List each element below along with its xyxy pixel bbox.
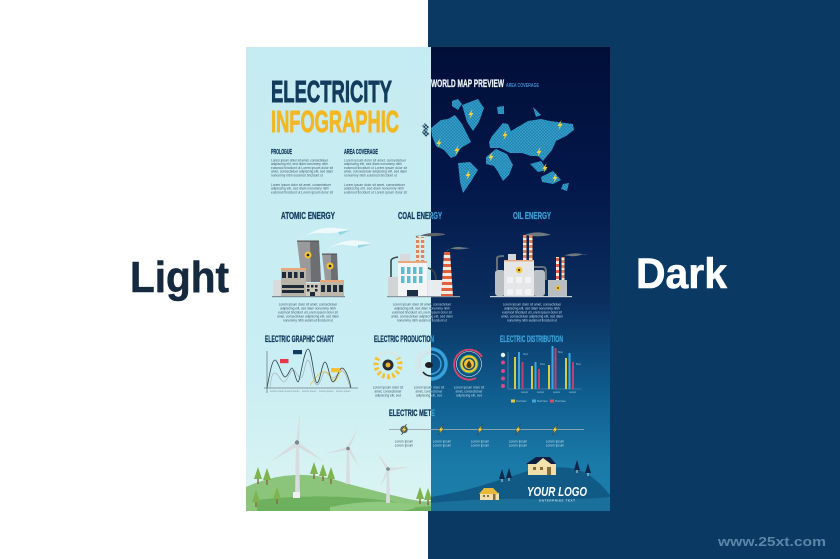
bar chart: electric distribution: Text bbox=[523, 353, 528, 356]
heading: electric graphic chart: ELECTRIC GRAPHIC CHART bbox=[265, 334, 334, 344]
logo bbox=[527, 484, 587, 502]
icon: wind turbine small bbox=[376, 452, 410, 503]
text block: prologue: Lorem ipsum dolor sit amet, consectetuer bbox=[271, 183, 332, 187]
text block: production three bbox=[454, 386, 484, 398]
text block: production three: amet, consectetuer bbox=[455, 390, 483, 394]
text block: coal description: euismod tincidunt ut Lorem ipsum dolor sit bbox=[392, 310, 452, 314]
text block: atomic description: nonummy nibh euismod tincidunt ut bbox=[283, 318, 333, 322]
text block: area coverage: Lorem ipsum dolor sit amet, consectetuer bbox=[344, 158, 407, 162]
text block: area coverage bbox=[344, 149, 407, 194]
line chart bbox=[264, 349, 358, 393]
bar chart: electric distribution: Lorem bbox=[537, 391, 544, 394]
text block: atomic description: Lorem ipsum dolor sit amet, consectetuer bbox=[279, 302, 338, 306]
text block: area coverage: amet, consectetuer adipiscing elit, sed diam bbox=[344, 170, 407, 174]
icons: dark trees bbox=[499, 460, 591, 482]
legend: Text here bbox=[555, 399, 566, 403]
panel: light half of poster bbox=[246, 47, 431, 511]
meter labels: Lorem ipsum bbox=[433, 440, 452, 444]
line chart: Lorem ipsum bbox=[302, 390, 316, 393]
meter labels bbox=[395, 440, 565, 448]
text block: atomic description: amet, consectetuer adipiscing elit, sed diam bbox=[277, 314, 339, 318]
heading: world map preview: AREA COVERAGE bbox=[506, 83, 539, 89]
text block: oil description: euismod tincidunt ut Lorem ipsum dolor sit bbox=[502, 310, 562, 314]
meter labels: Lorem ipsum bbox=[546, 444, 565, 448]
meter labels: Lorem ipsum bbox=[509, 444, 528, 448]
bar chart: electric distribution: Text bbox=[558, 351, 563, 354]
logo: ENTERPRISE TEXT bbox=[539, 498, 575, 502]
title: INFOGRAPHIC bbox=[271, 104, 399, 139]
text block: production two: amet, consectetuer bbox=[415, 390, 443, 394]
panel: dark half of poster bbox=[428, 47, 610, 511]
icon: wind turbine large bbox=[270, 412, 325, 498]
icons: meter markers bbox=[400, 424, 558, 435]
icon: oil power plant bbox=[490, 232, 588, 297]
landscape: light side bbox=[246, 412, 432, 511]
text block: prologue: euismod tincidunt ut Lorem ipsum dolor sit bbox=[271, 166, 333, 170]
heading: oil energy: OIL ENERGY bbox=[513, 211, 551, 222]
text block: coal description: nonummy nibh euismod tincidunt ut bbox=[397, 318, 447, 322]
meter line bbox=[389, 428, 584, 431]
bar chart: electric distribution: Text bbox=[576, 363, 581, 366]
legend: Text here bbox=[516, 399, 527, 403]
meter labels: Lorem ipsum bbox=[509, 440, 528, 444]
bar chart: electric distribution: Lorem bbox=[569, 391, 576, 394]
line chart: Lorem ipsum bbox=[319, 390, 333, 393]
icons: light trees bbox=[252, 462, 432, 507]
text block: atomic description: adipiscing elit, sed diam nonummy nibh bbox=[280, 306, 336, 310]
label: Dark: Dark bbox=[636, 250, 727, 298]
watermark: www.25xt.com bbox=[717, 535, 826, 549]
icons: bulbs bbox=[501, 353, 505, 388]
icon: atomic power plant bbox=[272, 228, 372, 297]
text block: oil description: nonummy nibh euismod tincidunt ut bbox=[507, 318, 557, 322]
text block: coal description: Lorem ipsum dolor sit amet, consectetuer bbox=[393, 302, 452, 306]
text block: area coverage: Lorem ipsum dolor sit amet, consectetuer bbox=[344, 183, 406, 187]
text block: area coverage: euismod tincidunt ut Lorem ipsum dolor sit bbox=[344, 166, 407, 170]
icon: oil production ring bbox=[454, 350, 482, 380]
line chart: Lorem ipsum bbox=[270, 390, 284, 393]
heading: coal energy: COAL ENERGY bbox=[398, 211, 442, 222]
text block: production three: Lorem ipsum dolor sit bbox=[454, 386, 484, 390]
icons: lightning markers on map bbox=[436, 109, 562, 183]
line chart: Lorem ipsum bbox=[285, 390, 299, 393]
bar chart: electric distribution: Lorem bbox=[521, 391, 528, 394]
text block: production one: Lorem ipsum dolor sit bbox=[373, 386, 403, 390]
text block: atomic description: euismod tincidunt ut Lorem ipsum dolor sit bbox=[278, 310, 338, 314]
text block: prologue: adipiscing elit, sed diam nonummy nibh bbox=[271, 187, 329, 191]
text block: area coverage: nonummy nibh euismod tincidunt ut bbox=[344, 173, 397, 177]
text block: production two: Lorem ipsum dolor sit bbox=[414, 386, 444, 390]
text block: prologue: Lorem ipsum dolor sit amet, consectetuer bbox=[271, 158, 329, 162]
icon: large house bbox=[526, 457, 556, 475]
text block: area coverage: adipiscing elit, sed diam nonummy nibh bbox=[344, 162, 402, 166]
meter labels: Lorem ipsum bbox=[471, 444, 490, 448]
icon: map fragment on light side bbox=[422, 123, 430, 137]
text block: production one: adipiscing elit, sed bbox=[375, 394, 401, 398]
bar chart: electric distribution bbox=[501, 346, 581, 403]
text block: production one: amet, consectetuer bbox=[374, 390, 402, 394]
line chart: Lorem ipsum bbox=[336, 390, 350, 393]
text block: prologue: adipiscing elit, sed diam nonummy nibh bbox=[271, 162, 328, 166]
meter labels: Lorem ipsum bbox=[395, 440, 414, 444]
text block: prologue: amet, consectetuer adipiscing elit, sed diam bbox=[271, 170, 333, 174]
text block: prologue: PROLOGUE bbox=[271, 149, 292, 156]
meter labels: Lorem ipsum bbox=[471, 440, 490, 444]
landscape: dark side bbox=[431, 457, 610, 511]
logo: YOUR LOGO bbox=[527, 484, 587, 499]
text block: coal description: adipiscing elit, sed diam nonummy nibh bbox=[394, 306, 450, 310]
title bbox=[271, 74, 399, 139]
label: Light: Light bbox=[130, 253, 229, 302]
bar chart: electric distribution: Lorem bbox=[553, 391, 560, 394]
text block: coal description bbox=[391, 302, 453, 322]
meter labels: Lorem ipsum bbox=[433, 444, 452, 448]
legend bbox=[511, 399, 566, 403]
world map bbox=[431, 99, 574, 193]
icon: atomic production sun bbox=[375, 352, 401, 378]
heading: atomic energy: ATOMIC ENERGY bbox=[281, 211, 335, 222]
text block: atomic description bbox=[277, 302, 339, 322]
text block: area coverage: AREA COVERAGE bbox=[344, 149, 378, 156]
text block: prologue: euismod tincidunt ut Lorem ipsum dolor sit bbox=[271, 190, 333, 194]
text block: production one bbox=[373, 386, 403, 398]
meter labels: Lorem ipsum bbox=[395, 444, 414, 448]
heading: electric distribution: ELECTRIC DISTRIBUTION bbox=[500, 334, 563, 344]
light background bbox=[0, 0, 428, 559]
text block: oil description: Lorem ipsum dolor sit amet, consectetuer bbox=[503, 302, 562, 306]
dark background bbox=[428, 0, 840, 559]
title: ELECTRICITY bbox=[271, 74, 392, 109]
text block: prologue: nonummy nibh euismod tincidunt ut bbox=[271, 173, 323, 177]
icon: coal production ring bbox=[416, 349, 446, 379]
text block: oil description: amet, consectetuer adipiscing elit, sed diam bbox=[501, 314, 563, 318]
legend: Text here bbox=[537, 399, 548, 403]
heading: electric production: ELECTRIC PRODUCTION bbox=[374, 334, 434, 344]
text block: production two bbox=[414, 386, 444, 398]
text block: oil description: adipiscing elit, sed diam nonummy nibh bbox=[504, 306, 560, 310]
heading: world map preview: WORLD MAP PREVIEW bbox=[431, 78, 504, 90]
text block: coal description: amet, consectetuer adipiscing elit, sed diam bbox=[391, 314, 453, 318]
text block: area coverage: euismod tincidunt ut Lorem ipsum dolor sit bbox=[344, 190, 407, 194]
text block: oil description bbox=[501, 302, 563, 322]
icon: wind turbine medium bbox=[324, 428, 360, 484]
text block: production two: adipiscing elit, sed bbox=[416, 394, 442, 398]
meter labels: Lorem ipsum bbox=[546, 440, 565, 444]
text block: prologue bbox=[271, 149, 333, 194]
text block: area coverage: adipiscing elit, sed diam nonummy nibh bbox=[344, 187, 404, 191]
bar chart: electric distribution: Text bbox=[540, 363, 545, 366]
icon: small house bbox=[479, 488, 499, 500]
icon: coal power plant bbox=[387, 233, 470, 297]
text block: production three: adipiscing elit, sed bbox=[456, 394, 482, 398]
heading: electric meter: ELECTRIC METE bbox=[389, 408, 435, 418]
